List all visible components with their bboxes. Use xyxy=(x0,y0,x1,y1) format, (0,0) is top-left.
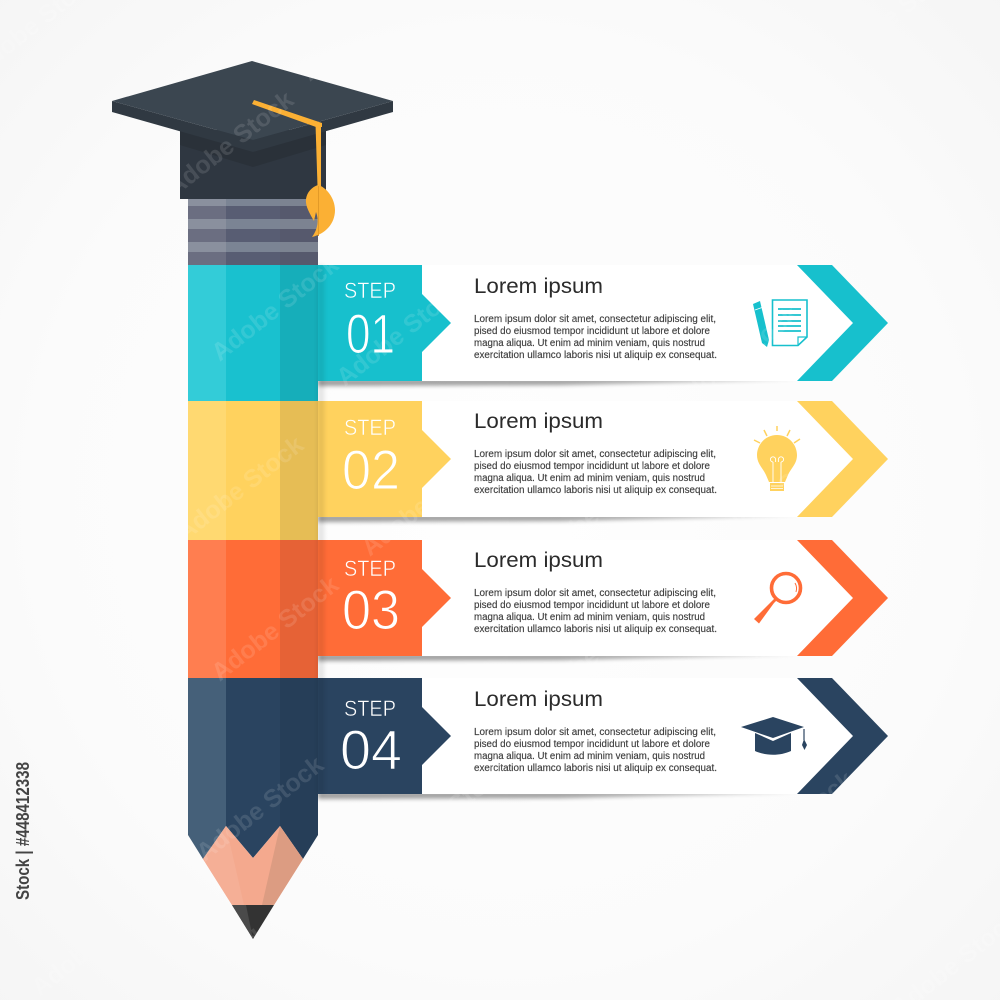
watermark: Adobe Stock xyxy=(706,436,844,552)
step 1 body text: exercitation ullamco laboris nisi ut aliquip ex consequat. xyxy=(474,350,717,361)
panel: step 2 xyxy=(318,401,888,517)
step 2 body text: exercitation ullamco laboris nisi ut aliquip ex consequat. xyxy=(474,485,717,496)
step 4 body text: exercitation ullamco laboris nisi ut aliquip ex consequat. xyxy=(474,763,717,774)
step 1 number: 01 xyxy=(346,302,395,365)
step 4 body text: Lorem ipsum dolor sit amet, consectetur adipiscing elit, xyxy=(474,727,716,738)
step 4 number: 04 xyxy=(340,718,402,781)
watermark: Adobe Stock xyxy=(376,756,514,872)
step 1 ribbon xyxy=(318,265,451,381)
cap base xyxy=(180,130,326,199)
step 3 body text xyxy=(474,588,717,635)
step 1 body text: magna aliqua. Ut enim ad minim veniam, quis nostrud xyxy=(474,338,705,349)
watermark: Adobe Stock xyxy=(366,76,504,192)
step 4 heading: Lorem ipsum xyxy=(474,688,603,711)
ribbon shadows xyxy=(318,379,800,799)
pencil yellow segment xyxy=(188,401,318,540)
step 3 label: STEP xyxy=(344,556,396,581)
step 2 label: STEP xyxy=(344,415,396,440)
watermark: Adobe Stock xyxy=(496,116,634,232)
watermark: Adobe Stock xyxy=(191,751,329,867)
watermark: Adobe Stock xyxy=(826,126,964,242)
watermark: Adobe Stock xyxy=(26,886,164,1000)
watermark: Adobe Stock xyxy=(851,781,989,897)
step 3 body text: pised do eiusmod tempor incididunt ut labore et dolore xyxy=(474,600,710,611)
step 1 heading: Lorem ipsum xyxy=(474,275,603,298)
watermark: Adobe Stock xyxy=(721,766,859,882)
icon: graduation cap xyxy=(741,717,807,755)
watermark: Adobe Stock xyxy=(206,251,344,367)
step 2 white card xyxy=(422,401,853,517)
watermark: Adobe Stock xyxy=(696,81,834,197)
step 3 body text: exercitation ullamco laboris nisi ut aliquip ex consequat. xyxy=(474,624,717,635)
step 2 body text: Lorem ipsum dolor sit amet, consectetur adipiscing elit, xyxy=(474,449,716,460)
watermark: Adobe Stock xyxy=(171,431,309,547)
step 1 body text: pised do eiusmod tempor incididunt ut labore et dolore xyxy=(474,326,710,337)
step 4 ribbon xyxy=(318,678,451,794)
pencil teal segment xyxy=(188,265,318,401)
watermark: Adobe Stock xyxy=(696,596,834,712)
step 1 chevron xyxy=(797,265,888,381)
watermark: Adobe Stock xyxy=(666,301,804,417)
watermark: Adobe Stock xyxy=(526,456,664,572)
pencil edge shadow xyxy=(318,265,324,794)
watermark: Adobe Stock xyxy=(206,571,344,687)
vertical stock id: Stock | #448412338 xyxy=(13,762,33,900)
cap board xyxy=(112,61,393,152)
step 1 body text xyxy=(474,314,717,361)
step 2 ribbon xyxy=(318,401,451,517)
pencil navy segment xyxy=(188,678,318,859)
watermark: Adobe Stock xyxy=(51,726,189,842)
watermark: Adobe Stock xyxy=(356,446,494,562)
tassel xyxy=(252,100,335,237)
watermark: Adobe Stock xyxy=(1,266,139,382)
step 4 chevron xyxy=(797,678,888,794)
step 3 heading: Lorem ipsum xyxy=(474,549,603,572)
step 2 body text: magna aliqua. Ut enim ad minim veniam, quis nostrud xyxy=(474,473,705,484)
watermark: Adobe Stock xyxy=(526,596,664,712)
watermark: Adobe Stock xyxy=(546,226,684,342)
step 1 body text: Lorem ipsum dolor sit amet, consectetur adipiscing elit, xyxy=(474,314,716,325)
step 4 label: STEP xyxy=(344,696,396,721)
panel: step 1 xyxy=(318,265,888,381)
pencil wood tip xyxy=(203,826,303,905)
step 2 body text: pised do eiusmod tempor incididunt ut labore et dolore xyxy=(474,461,710,472)
step 1 white card xyxy=(422,265,853,381)
step 4 body text: pised do eiusmod tempor incididunt ut labore et dolore xyxy=(474,739,710,750)
panel: step 4 xyxy=(318,678,888,794)
step 3 white card xyxy=(422,540,853,656)
step 2 body text xyxy=(474,449,717,496)
step 3 body text: Lorem ipsum dolor sit amet, consectetur adipiscing elit, xyxy=(474,588,716,599)
pencil lead xyxy=(232,905,274,939)
step 4 body text xyxy=(474,727,717,774)
pencil with graduation cap xyxy=(112,61,393,939)
watermark: Adobe Stock xyxy=(11,591,149,707)
icon: pencil and document xyxy=(753,300,807,347)
watermark: Adobe Stock xyxy=(226,851,364,967)
step 3 ribbon xyxy=(318,540,451,656)
step 3 body text: magna aliqua. Ut enim ad minim veniam, quis nostrud xyxy=(474,612,705,623)
pencil orange segment xyxy=(188,540,318,678)
watermark: Adobe Stock xyxy=(331,276,469,392)
watermark: Adobe Stock xyxy=(161,86,299,202)
icon: light bulb xyxy=(754,426,800,491)
step 4 white card xyxy=(422,678,853,794)
icon: magnifying glass xyxy=(754,574,800,624)
watermark: Adobe Stock xyxy=(841,446,979,562)
step 2 heading: Lorem ipsum xyxy=(474,410,603,433)
watermark: Adobe Stock xyxy=(46,391,184,507)
panel: step 3 xyxy=(318,540,888,656)
step 4 body text: magna aliqua. Ut enim ad minim veniam, quis nostrud xyxy=(474,751,705,762)
step 2 number: 02 xyxy=(342,438,400,501)
pencil ferrule stripes xyxy=(188,199,318,265)
step 3 number: 03 xyxy=(342,578,400,641)
watermark: Adobe Stock xyxy=(516,796,654,912)
step 1 label: STEP xyxy=(344,278,396,303)
step 2 chevron xyxy=(797,401,888,517)
step 3 chevron xyxy=(797,540,888,656)
